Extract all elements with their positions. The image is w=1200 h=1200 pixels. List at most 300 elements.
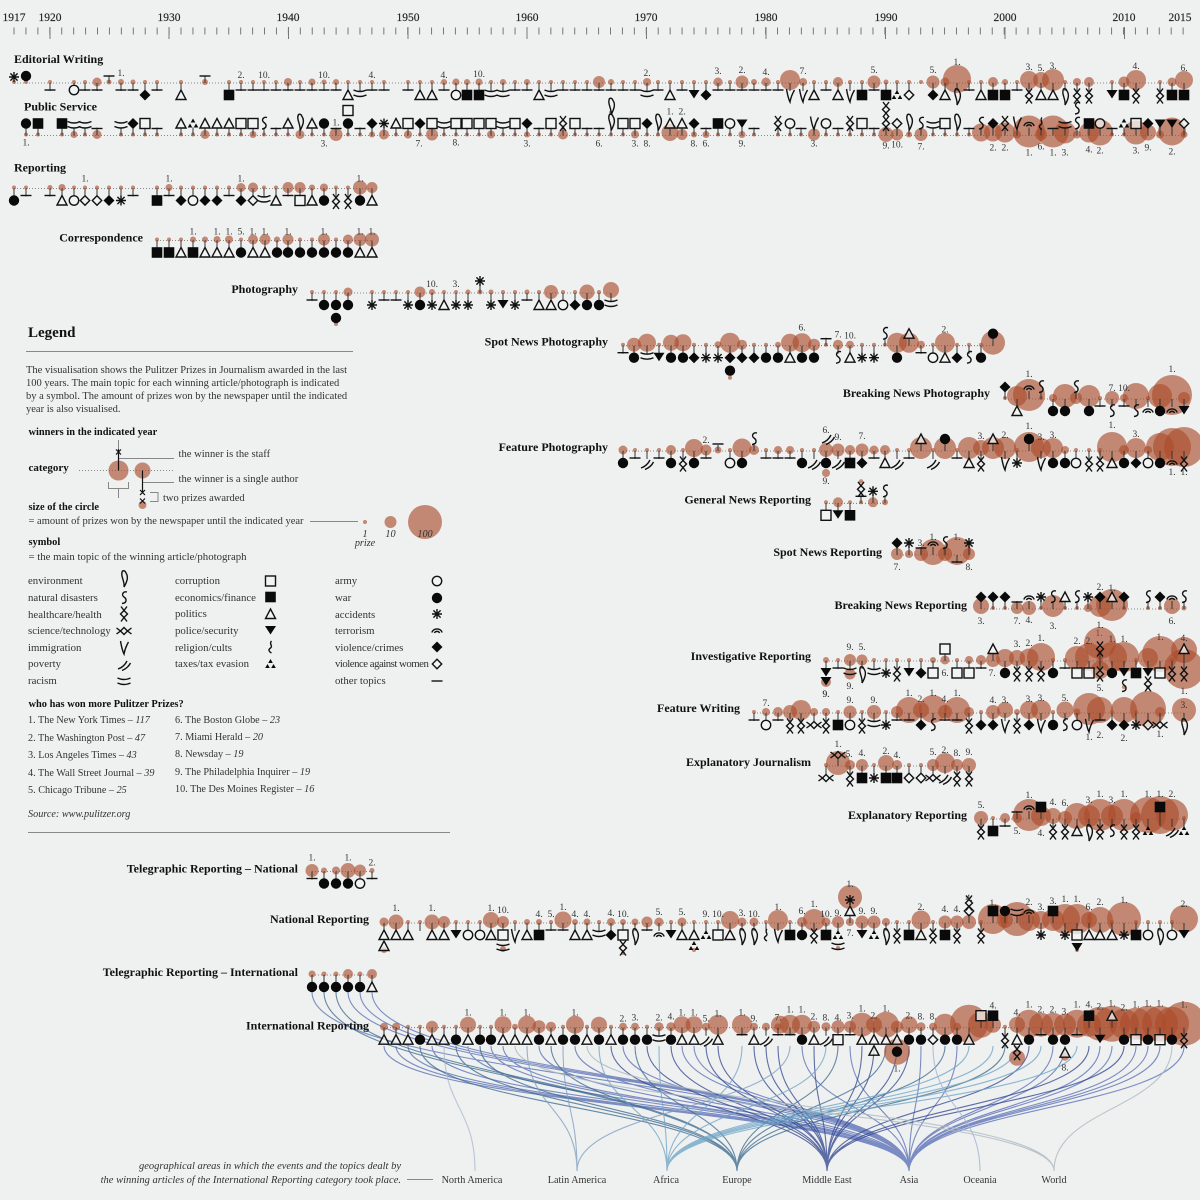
ranking numbers: 6. <box>702 140 710 150</box>
heading: Telegraphic Reporting – National <box>127 862 299 876</box>
ranking numbers: 1. <box>1085 733 1093 743</box>
ranking numbers: 1. <box>1095 629 1103 639</box>
symbol key: violence/crimes <box>335 642 403 654</box>
ranking numbers: 1. <box>714 1010 722 1020</box>
prize bubbles <box>833 497 888 507</box>
ranking numbers: 1. <box>1180 468 1188 478</box>
ranking numbers: 2. <box>368 858 376 868</box>
ranking numbers: 2. <box>1096 898 1104 908</box>
timeline axis: 1920 <box>38 12 62 24</box>
ranking numbers: 4. <box>1180 634 1188 644</box>
ranking numbers: 4. <box>1049 798 1057 808</box>
ranking numbers: 4. <box>1085 1001 1093 1011</box>
ranking numbers: 2. <box>941 746 949 756</box>
row: Investigative Reporting <box>691 621 1200 700</box>
ranking numbers: 8. <box>690 140 698 150</box>
ranking numbers: 9. <box>738 140 746 150</box>
heading: Breaking News Reporting <box>835 598 967 612</box>
symbol key: economics/finance <box>175 592 256 604</box>
ranking numbers: 1. <box>893 1065 901 1075</box>
ranking numbers: 6. <box>1061 799 1069 809</box>
ranking numbers: 1. <box>905 689 913 699</box>
ranking numbers: 10. <box>497 906 509 916</box>
ranking numbers <box>392 880 1188 939</box>
ranking numbers: 1. <box>810 900 818 910</box>
ranking numbers: 2. <box>1180 900 1188 910</box>
ranking numbers: 2. <box>1025 898 1033 908</box>
ranking numbers: 1. <box>1120 896 1128 906</box>
ranking numbers: 1. <box>559 903 567 913</box>
ranking numbers <box>977 583 1176 639</box>
top winners list: 8. Newsday – 19 <box>175 749 243 760</box>
ranking numbers: 1. <box>858 1005 866 1015</box>
ranking numbers: 4. <box>953 905 961 915</box>
ranking numbers: 3. <box>1061 1008 1069 1018</box>
ranking numbers: 7. <box>762 699 770 709</box>
ranking numbers: 7. <box>774 1014 782 1024</box>
ranking numbers: 1. <box>1168 468 1176 478</box>
intro paragraph: 100 years. The main topic for each winning article/photograph is indicated <box>26 378 340 389</box>
size scale: prize <box>354 538 376 549</box>
ranking numbers: 4. <box>965 894 973 904</box>
ranking numbers: 5. <box>977 801 985 811</box>
ranking numbers: 2. <box>1073 637 1081 647</box>
prize bubbles <box>306 863 374 878</box>
timeline axis: 2010 <box>1112 12 1136 24</box>
ranking numbers: 3. <box>1025 695 1033 705</box>
ranking numbers: 2. <box>1096 146 1104 156</box>
ranking numbers: 9. <box>882 142 890 152</box>
ranking numbers: 2. <box>905 1012 913 1022</box>
geographic area labels: World <box>1041 1175 1067 1186</box>
anatomy diagram: winners in the indicated year <box>28 427 158 438</box>
ranking numbers: 3. <box>810 140 818 150</box>
ranking numbers: 9. <box>822 690 830 700</box>
ranking numbers: 3. <box>452 280 460 290</box>
timeline axis: 1980 <box>754 12 778 24</box>
ranking numbers: 1. <box>1108 635 1116 645</box>
prize bubbles <box>974 796 1188 834</box>
ranking numbers: 1. <box>1025 370 1033 380</box>
ranking numbers: 1. <box>571 1009 579 1019</box>
size scale: 100 <box>417 529 433 540</box>
ranking numbers: 2. <box>1120 1004 1128 1014</box>
prize bubbles <box>973 589 1186 621</box>
ranking numbers: 1. <box>1061 895 1069 905</box>
row: Telegraphic Reporting National <box>127 854 378 889</box>
ranking numbers: 3. <box>846 1012 854 1022</box>
ranking numbers: 6. <box>941 669 949 679</box>
ranking numbers: 9. <box>870 696 878 706</box>
ranking numbers: 1. <box>1108 584 1116 594</box>
topic symbols <box>618 328 998 376</box>
symbol key: army <box>335 575 358 587</box>
ranking numbers: 3. <box>714 67 722 77</box>
topic symbols <box>821 482 888 521</box>
ranking numbers: 3. <box>523 140 531 150</box>
ranking numbers: 1. <box>189 228 197 238</box>
topic symbols <box>9 188 377 209</box>
ranking numbers: 5. <box>858 643 866 653</box>
ranking numbers: 3. <box>738 909 746 919</box>
symbol key: = the main topic of the winning article/photograph <box>28 551 247 563</box>
ranking numbers: 3. <box>1037 903 1045 913</box>
prize bubbles <box>627 331 1005 355</box>
ranking numbers: 2. <box>1001 144 1009 154</box>
curve to North America <box>444 1046 475 1171</box>
geographic area labels: the winning articles of the International Reporting category took place. <box>101 1175 401 1186</box>
ranking numbers: 1. <box>464 1009 472 1019</box>
ranking numbers: 3. <box>977 617 985 627</box>
ranking numbers: 10. <box>820 910 832 920</box>
size scale: = amount of prizes won by the newspaper until the indicated year <box>28 516 304 527</box>
intro paragraph: The visualisation shows the Pulitzer Prizes in Journalism awarded in the last <box>26 365 347 376</box>
row: Reporting <box>9 160 378 209</box>
ranking numbers: 5. <box>870 66 878 76</box>
ranking numbers: 1. <box>929 689 937 699</box>
ranking numbers: 1. <box>487 904 495 914</box>
legend title: Legend <box>28 325 76 341</box>
ranking numbers: 4. <box>440 71 448 81</box>
ranking numbers: 1. <box>678 1009 686 1019</box>
curves to Latin America <box>527 1046 790 1171</box>
row: International Reporting <box>246 1000 1200 1075</box>
ranking numbers: 6. <box>798 324 806 334</box>
ranking numbers: 7. <box>1108 384 1116 394</box>
ranking numbers: 3. <box>1085 796 1093 806</box>
ranking numbers: 3. <box>631 140 639 150</box>
ranking numbers: 1. <box>117 69 125 79</box>
panel: legend <box>26 325 450 832</box>
ranking numbers: 2. <box>917 903 925 913</box>
ranking numbers: 1. <box>774 903 782 913</box>
topic symbols <box>978 802 1189 841</box>
symbol key: war <box>335 592 352 604</box>
ranking numbers: 1. <box>523 1009 531 1019</box>
ranking numbers: 1. <box>165 174 173 184</box>
ranking numbers: 7. <box>846 929 854 939</box>
ranking numbers: 7. <box>834 331 842 341</box>
ranking numbers: 1. <box>261 228 269 238</box>
row: Breaking News Reporting <box>835 583 1187 639</box>
symbol key: police/security <box>175 625 239 637</box>
ranking numbers: 1. <box>344 854 352 864</box>
ranking numbers: 1. <box>738 1009 746 1019</box>
timeline axis: 1917 <box>2 12 26 24</box>
prize bubbles <box>891 537 975 565</box>
topic symbols <box>9 71 1189 105</box>
topic symbols <box>618 433 1188 472</box>
ranking numbers: 3. <box>1108 796 1116 806</box>
topic symbols <box>379 1010 1188 1060</box>
topic symbols <box>892 537 974 563</box>
timeline axis: 1990 <box>874 12 898 24</box>
ranking numbers: 1. <box>989 899 997 909</box>
ranking numbers: 1. <box>213 228 221 238</box>
ranking numbers: 6. <box>1037 142 1045 152</box>
heading: Photography <box>231 282 298 296</box>
ranking numbers: 5. <box>655 908 663 918</box>
top winners list: 6. The Boston Globe – 23 <box>175 715 280 726</box>
ranking numbers: 1. <box>953 58 961 68</box>
ranking numbers <box>426 280 460 290</box>
ranking numbers: 9. <box>834 909 842 919</box>
ranking numbers: 3. <box>1049 897 1057 907</box>
ranking numbers <box>81 174 364 184</box>
ranking numbers: 1. <box>499 1009 507 1019</box>
ranking numbers: 1. <box>320 228 328 238</box>
ranking numbers: 9. <box>822 690 830 700</box>
timeline axis: 2000 <box>994 12 1017 24</box>
symbol key: racism <box>28 675 57 687</box>
topic symbols <box>152 240 377 258</box>
intro paragraph: by a symbol. The amount of prizes won by the newspaper until the indicated <box>26 391 348 402</box>
timeline axis: 1940 <box>276 12 300 24</box>
timeline axis: 1970 <box>634 12 658 24</box>
topic symbols <box>379 895 1190 956</box>
ranking numbers: 7. <box>1013 617 1021 627</box>
ranking numbers: 4. <box>893 751 901 761</box>
row: Explanatory Journalism <box>686 740 976 786</box>
ranking numbers: 1. <box>690 1009 698 1019</box>
symbol key: immigration <box>28 642 82 654</box>
ranking numbers: 4. <box>1132 62 1140 72</box>
ranking numbers: 5. <box>547 910 555 920</box>
ranking numbers: 3. <box>917 539 925 549</box>
ranking numbers: 4. <box>1013 1009 1021 1019</box>
ranking numbers: 2. <box>1168 148 1176 158</box>
ranking numbers: 1. <box>284 228 292 238</box>
ranking numbers: 2. <box>1096 1003 1104 1013</box>
ranking numbers: 1. <box>786 1006 794 1016</box>
ranking numbers: 1. <box>1037 634 1045 644</box>
symbol key: environment <box>28 575 83 587</box>
row: Spot News Reporting <box>773 533 975 573</box>
ranking numbers: 6. <box>595 140 603 150</box>
ranking numbers: 1. <box>392 904 400 914</box>
ranking numbers: 5. <box>1061 694 1069 704</box>
ranking numbers: 4. <box>858 749 866 759</box>
ranking numbers: 1. <box>428 904 436 914</box>
ranking numbers: 2. <box>1037 1006 1045 1016</box>
ranking numbers: 5. <box>678 908 686 918</box>
ranking numbers: 1. <box>1108 1000 1116 1010</box>
ranking numbers: 1. <box>1120 635 1128 645</box>
ranking numbers: 8. <box>917 1013 925 1023</box>
top winners list: 9. The Philadelphia Inquirer – 19 <box>175 767 310 778</box>
ranking numbers: 1. <box>929 533 937 543</box>
prize bubbles <box>821 627 1200 689</box>
ranking numbers: 10. <box>748 910 760 920</box>
topic symbols <box>820 642 1189 692</box>
ranking numbers: 5. <box>1037 64 1045 74</box>
symbol key: symbol <box>28 537 60 548</box>
ranking numbers: 2. <box>643 69 651 79</box>
symbol key: politics <box>175 608 207 620</box>
ranking numbers: 9. <box>834 433 842 443</box>
ranking numbers: 9. <box>846 643 854 653</box>
timeline axis: 1950 <box>396 12 420 24</box>
curves to World <box>515 1046 1172 1171</box>
row: National Reporting <box>270 880 1198 956</box>
ranking numbers: 4. <box>368 71 376 81</box>
ranking numbers: 1. <box>249 228 257 238</box>
ranking numbers: 1. <box>356 174 364 184</box>
ranking numbers: 7. <box>988 669 996 679</box>
ranking numbers <box>308 854 376 868</box>
ranking numbers: 1. <box>1156 1000 1164 1010</box>
prize bubbles <box>1007 375 1192 415</box>
ranking numbers: 1. <box>1132 1001 1140 1011</box>
symbol key: religion/cults <box>175 642 232 654</box>
ranking numbers: 1. <box>1180 1001 1188 1011</box>
ranking numbers: 1. <box>1156 730 1164 740</box>
geographic area labels: Asia <box>900 1175 919 1186</box>
symbol key: terrorism <box>335 625 375 637</box>
row: Photography <box>231 276 619 324</box>
prize bubbles <box>48 180 378 194</box>
prize bubbles <box>70 116 1188 148</box>
ranking numbers: 10. <box>712 910 724 920</box>
heading: Breaking News Photography <box>843 386 990 400</box>
timeline axis: 2015 <box>1168 12 1192 24</box>
ranking numbers: 2. <box>738 66 746 76</box>
ranking numbers: 1. <box>1180 687 1188 697</box>
ranking numbers: 9. <box>846 682 854 692</box>
ranking numbers: 5. <box>702 1015 710 1025</box>
ranking numbers: 8. <box>643 140 651 150</box>
symbol key: other topics <box>335 675 386 687</box>
ranking numbers: 4. <box>1025 616 1033 626</box>
ranking numbers: 3. <box>1037 694 1045 704</box>
curve to Oceania <box>933 1046 980 1171</box>
top winners list: 1. The New York Times – 117 <box>28 715 151 726</box>
heading: General News Reporting <box>684 492 811 506</box>
anatomy diagram <box>28 427 299 509</box>
ranking numbers: 10. <box>1118 384 1130 394</box>
curves to Asia <box>312 992 1184 1171</box>
symbol key: poverty <box>28 658 62 670</box>
ranking numbers: 3. <box>1180 701 1188 711</box>
size scale: size of the circle <box>28 502 99 513</box>
ranking numbers: 9. <box>750 1015 758 1025</box>
ranking numbers: 1. <box>1025 422 1033 432</box>
heading: Spot News Photography <box>485 335 608 349</box>
ranking numbers: 8. <box>965 563 973 573</box>
ranking numbers <box>117 58 1188 81</box>
prize bubbles <box>190 232 379 246</box>
topic symbols <box>748 713 1187 735</box>
heading: Correspondence <box>59 230 144 244</box>
topic symbols <box>818 752 972 786</box>
anatomy diagram: two prizes awarded <box>163 493 245 504</box>
ranking numbers: 4. <box>571 910 579 920</box>
ranking numbers: 10. <box>426 280 438 290</box>
ranking numbers: 1. <box>1168 365 1176 375</box>
ranking numbers: 10. <box>891 140 903 150</box>
top winners list: 5. Chicago Tribune – 25 <box>28 785 127 796</box>
ranking numbers: 4. <box>1037 829 1045 839</box>
topic symbols <box>306 276 618 323</box>
ranking numbers: 4. <box>834 1014 842 1024</box>
prize bubbles <box>380 885 1198 953</box>
symbol key: corruption <box>175 575 221 587</box>
timeline axis <box>2 12 1192 39</box>
ranking numbers: 8. <box>822 1014 830 1024</box>
ranking numbers: 10. <box>258 71 270 81</box>
ranking numbers: 7. <box>893 563 901 573</box>
ranking numbers: 2. <box>619 1015 627 1025</box>
ranking numbers: 1. <box>356 228 364 238</box>
ranking numbers: 2. <box>678 108 686 118</box>
ranking numbers: 9. <box>1144 144 1152 154</box>
ranking numbers: 2. <box>1001 431 1009 441</box>
ranking numbers: 7. <box>917 142 925 152</box>
ranking numbers: 9. <box>822 477 830 487</box>
ranking numbers: 4. <box>667 1013 675 1023</box>
ranking numbers: 1. <box>22 138 30 148</box>
ranking numbers <box>189 228 376 238</box>
ranking numbers: 5. <box>237 228 245 238</box>
geographic area labels: Middle East <box>802 1175 852 1186</box>
geographic area labels: North America <box>442 1175 503 1186</box>
size scale <box>28 502 442 549</box>
ranking numbers: 1. <box>834 740 842 750</box>
prize bubbles <box>762 691 1196 727</box>
ranking numbers: 3. <box>1132 146 1140 156</box>
ranking numbers: 1. <box>237 174 245 184</box>
ranking numbers: 4. <box>607 909 615 919</box>
ranking numbers: 2. <box>1120 734 1128 744</box>
ranking numbers: 2. <box>1085 637 1093 647</box>
ranking numbers: 6. <box>1168 617 1176 627</box>
ranking numbers: 4. <box>989 1002 997 1012</box>
ranking numbers <box>1025 365 1176 394</box>
ranking numbers: 5. <box>1096 684 1104 694</box>
ranking numbers: 3. <box>631 1014 639 1024</box>
heading: International Reporting <box>246 1019 369 1033</box>
top winners list: 3. Los Angeles Times – 43 <box>28 750 137 761</box>
geographic area labels: Europe <box>722 1175 752 1186</box>
curves to Middle East <box>611 1046 1124 1171</box>
ranking numbers: 1. <box>846 880 854 890</box>
symbol key: natural disasters <box>28 592 98 604</box>
geographic area labels: Oceania <box>963 1175 997 1186</box>
size scale: 1 <box>362 529 368 540</box>
heading: Investigative Reporting <box>691 649 811 663</box>
ranking numbers: 9. <box>846 696 854 706</box>
top winners list: 4. The Wall Street Journal – 39 <box>28 768 154 779</box>
ranking numbers: 5. <box>929 66 937 76</box>
ranking numbers <box>798 324 949 342</box>
intro paragraph: year is also visualised. <box>26 404 120 415</box>
ranking numbers: 10. <box>473 70 485 80</box>
anatomy diagram: the winner is the staff <box>178 449 271 460</box>
prize bubbles <box>380 1002 1200 1066</box>
top winners list: 7. Miami Herald – 20 <box>175 732 263 743</box>
ranking numbers: 1. <box>1144 1000 1152 1010</box>
geographic area labels <box>101 1161 1067 1186</box>
topic symbols <box>306 872 378 889</box>
ranking numbers: 1. <box>1144 790 1152 800</box>
heading: Feature Writing <box>657 701 740 715</box>
ranking numbers <box>702 421 1188 487</box>
top winners list: 2. The Washington Post – 47 <box>28 733 146 744</box>
ranking numbers: 6. <box>822 426 830 436</box>
heading: Spot News Reporting <box>773 545 882 559</box>
ranking numbers <box>762 689 1188 744</box>
ranking numbers: 7. <box>415 140 423 150</box>
